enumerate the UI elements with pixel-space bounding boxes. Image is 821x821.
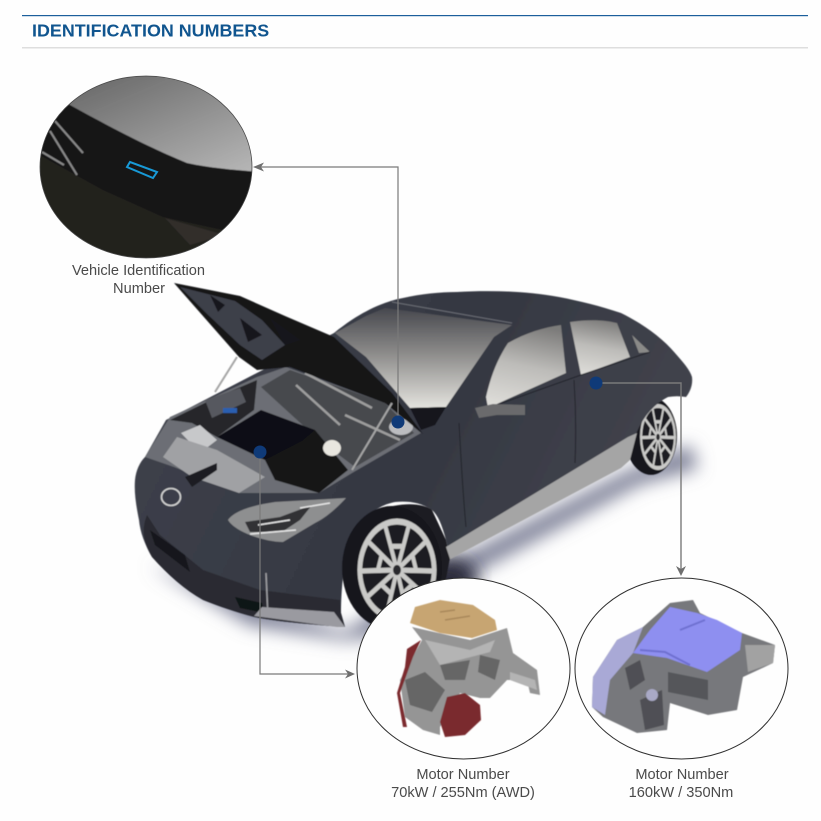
wheel arch [360,504,450,600]
arrow: to VIN detail [253,162,404,428]
vehicle identification number detail circle [40,76,252,258]
open hood [174,283,423,434]
motor circle rear [575,578,788,759]
headlight detail [245,503,330,534]
rear side window [570,320,630,375]
windshield [335,308,512,408]
engine bay [145,367,421,493]
photo of cowl area [40,76,252,258]
motor 70kW illustration [397,600,540,737]
front wheel [342,506,442,630]
engine bay dark details [163,370,446,493]
VIN label: Vehicle Identification [72,263,205,279]
front fascia and plate [144,515,345,627]
lower sill [446,433,637,559]
door seams and mirror [392,302,650,527]
hood underside [180,287,300,360]
front side window [486,325,566,408]
motor 160kW illustration [592,600,775,733]
headlight [228,498,346,542]
motor label 70kW: Motor Number [416,767,510,783]
VIN location marker [127,162,157,178]
front trunk [217,410,315,460]
title: IDENTIFICATION NUMBERS [32,20,269,40]
VIN label second line: Number [113,281,165,297]
car illustration [135,283,698,640]
car body [135,291,692,627]
rear wheel [625,397,677,475]
front wheel contact shadow [424,558,476,602]
circle outline [40,76,252,258]
hood struts [215,357,392,470]
motor spec 70kW: 70kW / 255Nm (AWD) [391,785,535,801]
motor label 160kW: Motor Number [635,767,729,783]
front badge [162,488,180,506]
ground shadow [150,445,698,640]
arrow: to rear motor [590,376,686,576]
arrow: to front motor [254,446,355,678]
motor spec 160kW: 160kW / 350Nm [629,785,733,801]
quarter glass [632,335,650,353]
motor circle front [357,578,570,759]
